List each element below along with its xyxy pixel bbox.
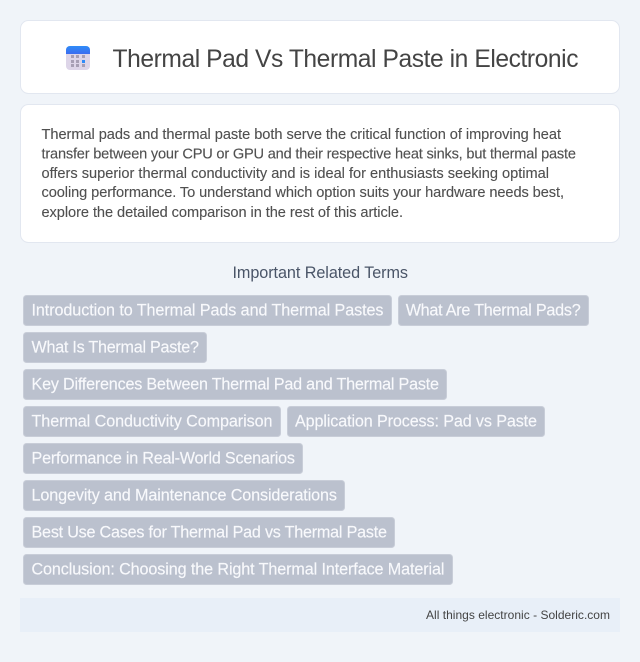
- heading: important related terms: Important Related Terms: [232, 264, 408, 282]
- tag: best use cases: [24, 518, 394, 548]
- tag: longevity: Longevity and Maintenance Considerations: [32, 486, 337, 504]
- panel: intro paragraph: Thermal pads and thermal paste both serve the critical function of improving heat: [42, 127, 561, 143]
- tag: what is thermal paste: [24, 332, 206, 362]
- tag: what is thermal paste: What Is Thermal Paste?: [32, 338, 199, 356]
- tag: performance: Performance in Real-World Scenarios: [32, 450, 295, 468]
- panel: intro paragraph: explore the detailed comparison in the rest of this article.: [42, 205, 403, 221]
- tag: application process: [288, 406, 544, 436]
- tag: best use cases: Best Use Cases for Thermal Pad vs Thermal Paste: [32, 524, 387, 542]
- panel: related term tags: [24, 296, 588, 584]
- tag: what are thermal pads: What Are Thermal Pads?: [406, 302, 581, 320]
- tag: longevity: [24, 480, 344, 510]
- tag: application process: Application Process: Pad vs Paste: [295, 412, 537, 430]
- title: Thermal Pad Vs Thermal Paste in Electronic: [112, 46, 578, 73]
- footer: All things electronic - Solderic.com: [426, 608, 610, 622]
- panel: title card: [20, 20, 620, 94]
- tag: thermal conductivity: Thermal Conductivity Comparison: [32, 412, 272, 430]
- panel: intro paragraph: transfer between your CPU or GPU and their respective heat sinks, but thermal paste: [42, 146, 576, 162]
- panel: intro paragraph: cooling performance. To understand which option suits your hardware needs best,: [42, 185, 564, 201]
- icon: calendar grid: [66, 46, 90, 70]
- tag: what are thermal pads: [398, 296, 588, 326]
- tag: key differences: [24, 370, 446, 400]
- tag: conclusion: [24, 554, 452, 584]
- panel: intro paragraph: offers superior thermal conductivity and is ideal for enthusiasts seeking optimal: [42, 166, 549, 182]
- tag: introduction: [24, 296, 392, 326]
- tag: performance: [24, 444, 302, 474]
- tag: thermal conductivity: [24, 406, 280, 436]
- panel: intro paragraph: [20, 104, 620, 242]
- footer: [20, 598, 620, 632]
- tag: key differences: Key Differences Between Thermal Pad and Thermal Paste: [32, 376, 439, 394]
- tag: introduction: Introduction to Thermal Pads and Thermal Pastes: [32, 302, 384, 320]
- tag: conclusion: Conclusion: Choosing the Right Thermal Interface Material: [32, 560, 444, 578]
